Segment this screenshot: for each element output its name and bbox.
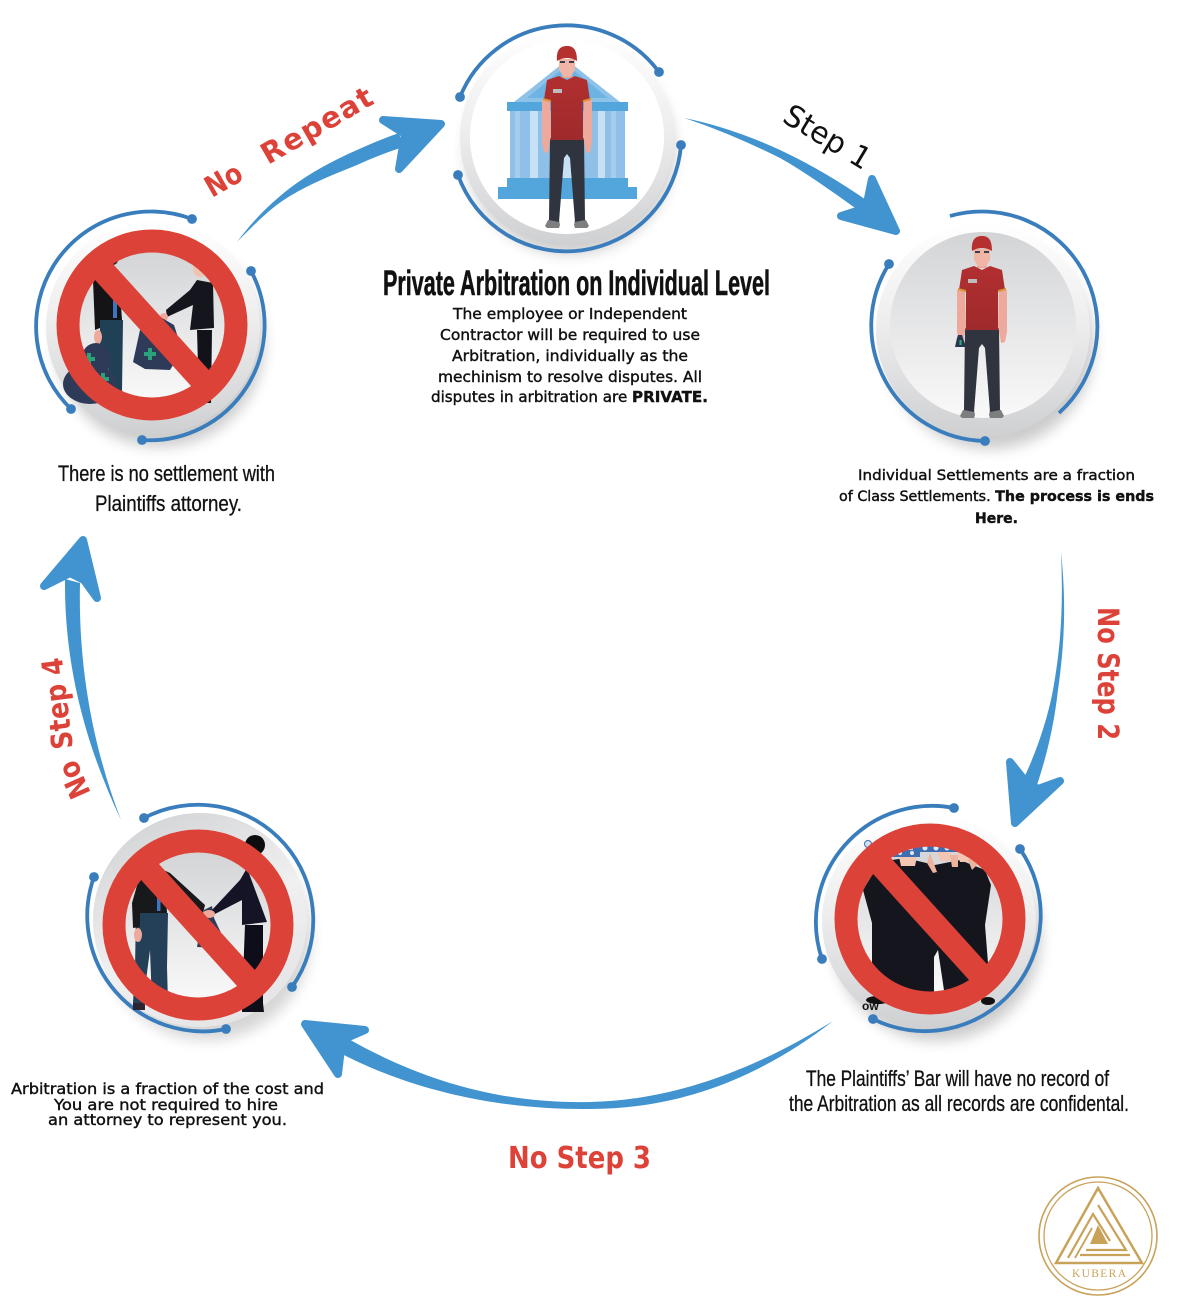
arrow: step 1 [684, 118, 896, 231]
ring arcs [455, 25, 684, 251]
text block: private arbitration description: The employee or Independent [452, 305, 687, 323]
text block: no settlement caption [58, 461, 275, 516]
text block: no settlement caption: Plaintiffs attorney. [95, 491, 242, 516]
ring arcs [816, 805, 1041, 1031]
icon: prohibition sign [68, 241, 236, 409]
logo: kubera [1039, 1177, 1157, 1295]
icon: prohibition sign [114, 841, 282, 1009]
figure: employee [542, 46, 592, 228]
label: no repeat: No [198, 156, 248, 204]
label: no step 4 [35, 656, 97, 804]
text block: step 1 caption [839, 468, 1154, 527]
arrow: no step 4 [44, 540, 121, 820]
text block: no attorney caption: You are not required to hire [53, 1096, 278, 1114]
text block: no record caption [789, 1066, 1129, 1116]
text block: private arbitration description: mechinism to resolve disputes. All [438, 368, 702, 386]
heading: private arbitration: Private Arbitration on Individual Level [383, 264, 770, 303]
text block: no record caption: The Plaintiffs’ Bar will have no record of [806, 1066, 1110, 1091]
arrow: no step 2 [1010, 552, 1064, 823]
icon: courthouse building [498, 60, 637, 199]
ring arcs [871, 212, 1097, 444]
text block: no attorney caption: Arbitration is a fraction of the cost and [11, 1080, 324, 1098]
ring arcs [87, 805, 313, 1032]
text block: no settlement caption: There is no settlement with [58, 461, 275, 486]
label: no repeat [198, 80, 379, 204]
label: step 1: Step 1 [777, 98, 877, 177]
label: no step 4: Step 4 [35, 656, 80, 751]
label: no repeat: Repeat [254, 80, 379, 171]
text block: private arbitration description [431, 305, 708, 406]
icon: prohibition sign [846, 835, 1014, 1003]
arrow: no step 3 [305, 1021, 833, 1109]
text block: no attorney caption: an attorney to represent you. [48, 1111, 287, 1129]
text block: private arbitration description: disputes in arbitration are PRIVATE. [431, 388, 708, 406]
figure: employee with money bag [957, 236, 1007, 418]
panel: no attorney node [87, 805, 313, 1040]
label: no step 4: No [51, 755, 97, 804]
text block: step 1 caption: of Class Settlements. The process is ends [839, 489, 1154, 505]
panel: no settlement node [36, 211, 265, 447]
icon: money bag [955, 335, 966, 347]
text block: step 1 caption: Individual Settlements are a fraction [858, 468, 1135, 484]
panel: step 1 individual settlement node [871, 212, 1097, 449]
figures: money bag handover [63, 255, 214, 404]
panel: no record node [816, 805, 1041, 1041]
figures: lawyers covering faces [863, 840, 995, 1005]
text block: no attorney caption [11, 1080, 324, 1129]
text block: step 1 caption: Here. [975, 511, 1018, 527]
ring arcs [36, 211, 265, 443]
panel: private arbitration node [455, 25, 684, 254]
arrow: no repeat [237, 120, 441, 242]
figures: handshake [132, 835, 267, 1012]
small label: ow [862, 999, 879, 1013]
text block: private arbitration description: Contractor will be required to use [440, 326, 700, 344]
text block: private arbitration description: Arbitration, individually as the [452, 347, 688, 365]
label: no step 2: No Step 2 [1091, 607, 1125, 740]
label: no step 3: No Step 3 [508, 1141, 651, 1176]
logo: kubera: KUBERA [1072, 1268, 1127, 1280]
